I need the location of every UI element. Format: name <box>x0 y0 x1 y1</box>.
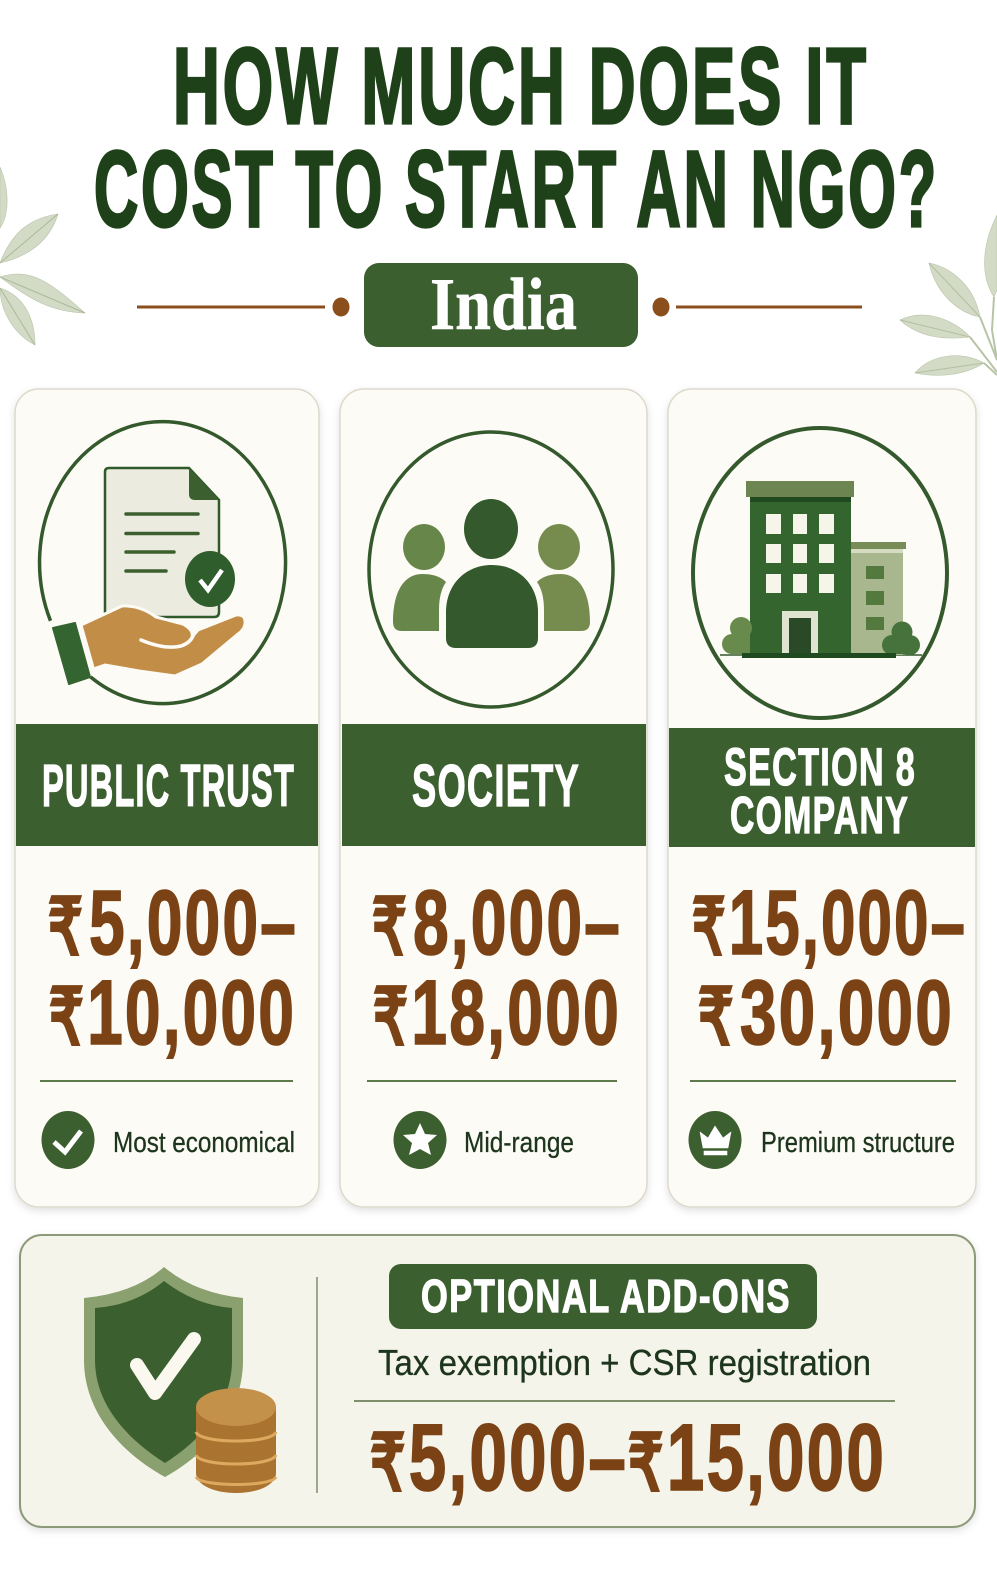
note: most economical <box>42 1111 295 1169</box>
heading band <box>342 724 646 846</box>
add-on price: ₹5,000–₹15,000 <box>370 1405 886 1511</box>
price range: ₹10,000 <box>49 962 296 1064</box>
note: most economical: Most economical <box>113 1127 295 1159</box>
icon: people group <box>369 432 613 707</box>
panel: public trust <box>15 389 319 1207</box>
icon: office building <box>693 428 947 718</box>
note: premium structure <box>688 1111 955 1169</box>
note: premium structure: Premium structure <box>761 1127 955 1159</box>
heading pill: OPTIONAL ADD-ONS <box>421 1270 791 1322</box>
heading band <box>16 724 318 846</box>
heading pill <box>389 1264 817 1329</box>
panel: optional add-ons <box>20 1235 975 1527</box>
description: Tax exemption + CSR registration <box>378 1342 871 1383</box>
price range: ₹18,000 <box>373 962 621 1064</box>
note: mid-range <box>394 1111 574 1169</box>
icon: coin stack <box>196 1388 276 1493</box>
price range: ₹8,000– <box>372 872 622 974</box>
price range: ₹5,000– <box>48 872 298 974</box>
price range <box>372 872 622 1064</box>
price range <box>48 872 298 1064</box>
panel: society <box>340 389 647 1207</box>
price range <box>692 872 967 1064</box>
title <box>94 25 939 249</box>
icon: shield with check <box>84 1267 243 1477</box>
heading band <box>669 728 975 847</box>
note: mid-range: Mid-range <box>464 1127 574 1159</box>
heading band: SOCIETY <box>412 753 580 819</box>
decorative leaves: right <box>900 215 997 375</box>
region badge: India: India <box>430 264 577 346</box>
heading band: PUBLIC TRUST <box>42 753 295 819</box>
panel: section 8 company <box>668 389 976 1207</box>
decorative leaves: left <box>0 167 85 345</box>
region badge: India <box>137 263 862 347</box>
icon: document on hand <box>40 422 286 704</box>
